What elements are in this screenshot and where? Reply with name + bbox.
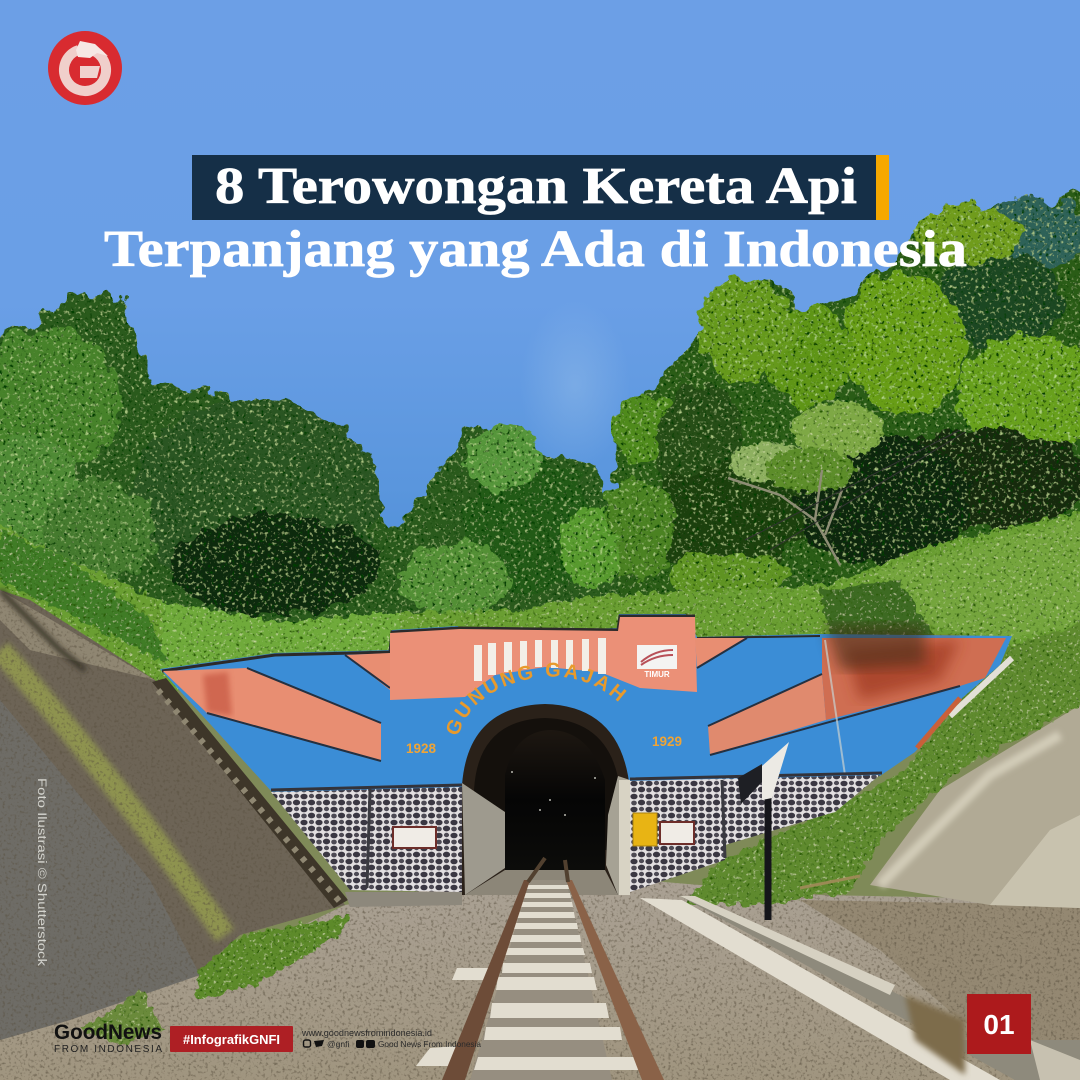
GoodNews wordmark: GoodNews (54, 1021, 162, 1044)
central salmon parapet (390, 617, 697, 700)
railway logo plaque (637, 645, 677, 679)
right salmon stripes (695, 638, 747, 668)
stone masonry base (271, 773, 882, 907)
page number badge (967, 994, 1031, 1054)
tunnel opening (462, 704, 630, 895)
arch lettering: 1928 (406, 741, 437, 756)
parapet vents (474, 638, 606, 681)
title line 2: Terpanjang yang Ada di Indonesia (104, 221, 967, 278)
tunnel side walls (462, 783, 505, 895)
wall outline (160, 614, 1012, 792)
arch lettering (406, 662, 682, 756)
left retaining slope (0, 590, 350, 1045)
ground and gravel (0, 870, 1080, 1080)
small bright tree (728, 402, 884, 565)
website and social handles (301, 1028, 481, 1049)
accent bar (876, 155, 889, 220)
arch lettering: 1929 (652, 734, 682, 749)
website and social handles: Good News From Indonesia (378, 1039, 481, 1049)
photo credit: Foto Ilustrasi © Shutterstock (35, 778, 47, 966)
grass bank behind the wall (0, 510, 1080, 690)
right slope and grass (685, 620, 1080, 908)
footer brand (54, 1021, 481, 1055)
right drainage ledge (640, 896, 1080, 1080)
hashtag tag (170, 1026, 293, 1052)
website and social handles: www.goodnewsfromindonesia.id (301, 1028, 432, 1038)
railway track (416, 858, 664, 1080)
hillside base colour (0, 640, 1080, 1080)
yellow warning plate (633, 813, 657, 846)
hashtag tag: #InfografikGNFI (183, 1032, 280, 1047)
page number badge: 01 (983, 1009, 1015, 1040)
publisher logo (48, 31, 122, 105)
tunnel portal wall (160, 614, 1014, 792)
title highlight bar (192, 155, 876, 220)
wall plaque left (393, 827, 436, 848)
concrete stairway (152, 678, 348, 908)
sleepers (416, 885, 656, 1070)
left salmon stripes (163, 668, 381, 761)
wall plaque right (660, 822, 694, 844)
website and social handles: @gnfi (327, 1039, 349, 1049)
railway logo plaque: TIMUR (644, 670, 670, 679)
title line 1: 8 Terowongan Kereta Api (215, 158, 857, 215)
title block (104, 155, 967, 278)
foliage: left trees (0, 290, 625, 640)
arch lettering: GUNUNG GAJAH (446, 662, 626, 734)
foliage: right bamboo hillside (595, 195, 1080, 620)
direction signpost (738, 742, 789, 920)
rails (442, 880, 530, 1080)
footer brand: FROM INDONESIA (54, 1044, 162, 1055)
